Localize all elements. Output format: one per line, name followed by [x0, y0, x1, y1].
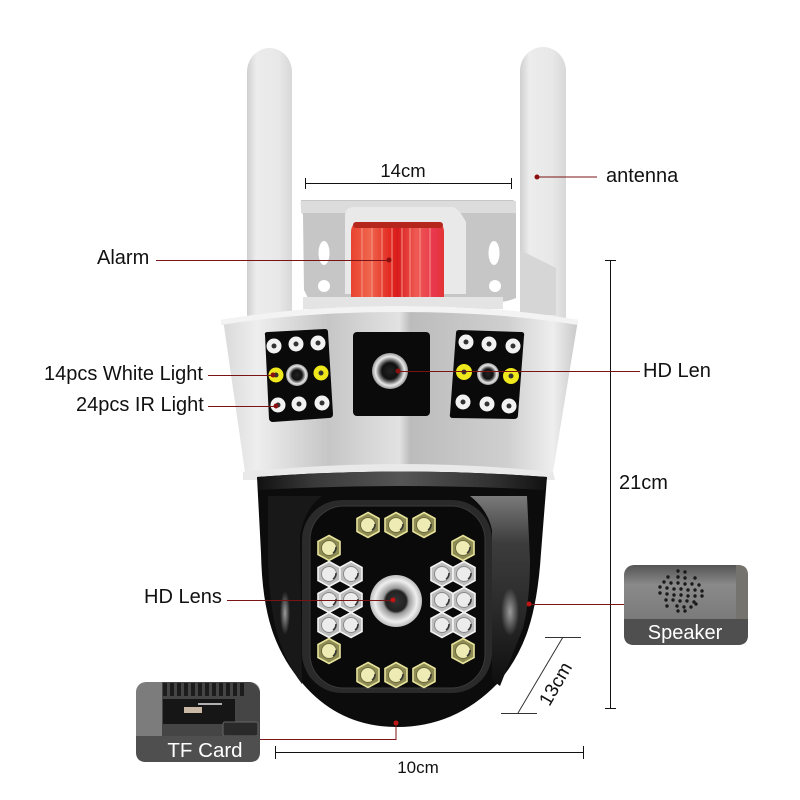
main lens	[370, 575, 422, 627]
speaker thumbnail: Speaker	[648, 622, 723, 644]
callout: TF card	[136, 682, 398, 762]
callout: antenna	[534, 165, 679, 187]
callout: IR light: 24pcs IR Light	[76, 394, 204, 416]
right light panel	[450, 330, 524, 419]
callout: alarm: Alarm	[97, 247, 149, 269]
alarm housing	[345, 207, 466, 300]
dimension 10cm: 10cm	[397, 758, 439, 777]
TF card thumbnail: TF Card	[167, 739, 243, 762]
alarm red light	[351, 222, 444, 300]
callout: IR light	[76, 394, 278, 416]
callout: HD Len: HD Len	[643, 360, 711, 382]
dimension 10cm	[275, 746, 584, 777]
front face	[302, 500, 492, 693]
dimension 21cm: 21cm	[619, 472, 668, 494]
callout: HD Len	[396, 360, 711, 382]
callout: antenna: antenna	[606, 165, 679, 187]
speaker thumbnail	[624, 565, 748, 645]
callout: white light: 14pcs White Light	[44, 363, 203, 385]
callout: HD Lens: HD Lens	[144, 586, 222, 608]
white camera body	[221, 306, 578, 480]
right dome side	[470, 496, 530, 686]
dimension 14cm: 14cm	[380, 160, 426, 181]
dimension 21cm	[605, 260, 668, 709]
center lens panel	[353, 332, 430, 416]
dimension 13cm	[501, 637, 581, 714]
dimension 14cm	[305, 160, 512, 189]
TF card thumbnail	[136, 682, 260, 762]
antenna right	[520, 47, 566, 320]
LEDs	[318, 512, 475, 688]
callout: HD Lens	[144, 586, 396, 608]
black dome	[257, 472, 547, 727]
callout: alarm	[97, 247, 392, 269]
antenna left	[247, 48, 292, 320]
left dome side	[268, 496, 322, 684]
speaker grille	[658, 569, 704, 613]
callout: speaker	[526, 565, 748, 645]
left light panel	[265, 329, 333, 422]
mounting bracket	[301, 200, 516, 302]
callout: white light	[44, 363, 276, 385]
dimension 13cm: 13cm	[536, 659, 577, 710]
